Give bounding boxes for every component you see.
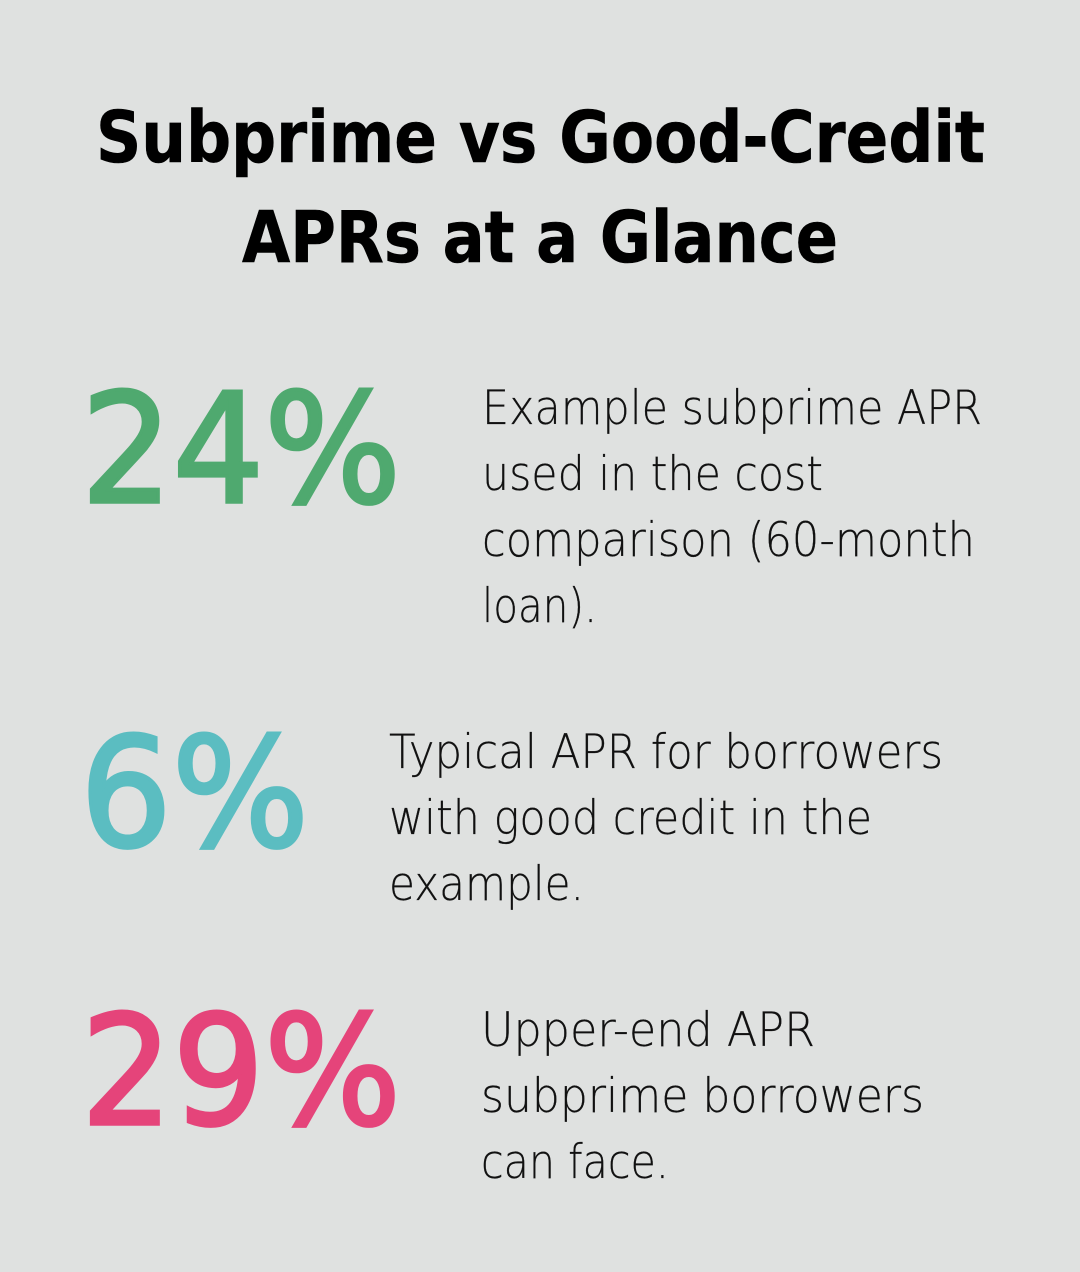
title: APRs at a Glance xyxy=(242,196,838,279)
description: 24%: loan). xyxy=(482,579,597,634)
description: 29% xyxy=(481,1003,924,1190)
description: 29%: can face. xyxy=(481,1135,669,1190)
stat: 6% xyxy=(80,705,943,912)
stat number: 24%: 24% xyxy=(81,361,401,538)
title: Subprime vs Good-Credit xyxy=(96,96,985,179)
stat number: 29%: 29% xyxy=(81,983,401,1160)
description: 6%: example. xyxy=(389,857,584,912)
stat: 29% xyxy=(81,983,924,1190)
stat number: 6%: 6% xyxy=(80,705,309,882)
title xyxy=(96,96,985,279)
description: 24%: used in the cost xyxy=(482,447,823,502)
description: 24% xyxy=(482,381,982,634)
description: 6%: with good credit in the xyxy=(389,791,872,846)
description: 24%: comparison (60-month xyxy=(482,513,975,568)
description: 29%: Upper-end APR xyxy=(481,1003,815,1058)
description: 29%: subprime borrowers xyxy=(481,1069,924,1124)
stat: 24% xyxy=(81,361,982,634)
description: 6%: Typical APR for borrowers xyxy=(389,725,943,780)
description: 24%: Example subprime APR xyxy=(482,381,982,436)
description: 6% xyxy=(389,725,943,912)
